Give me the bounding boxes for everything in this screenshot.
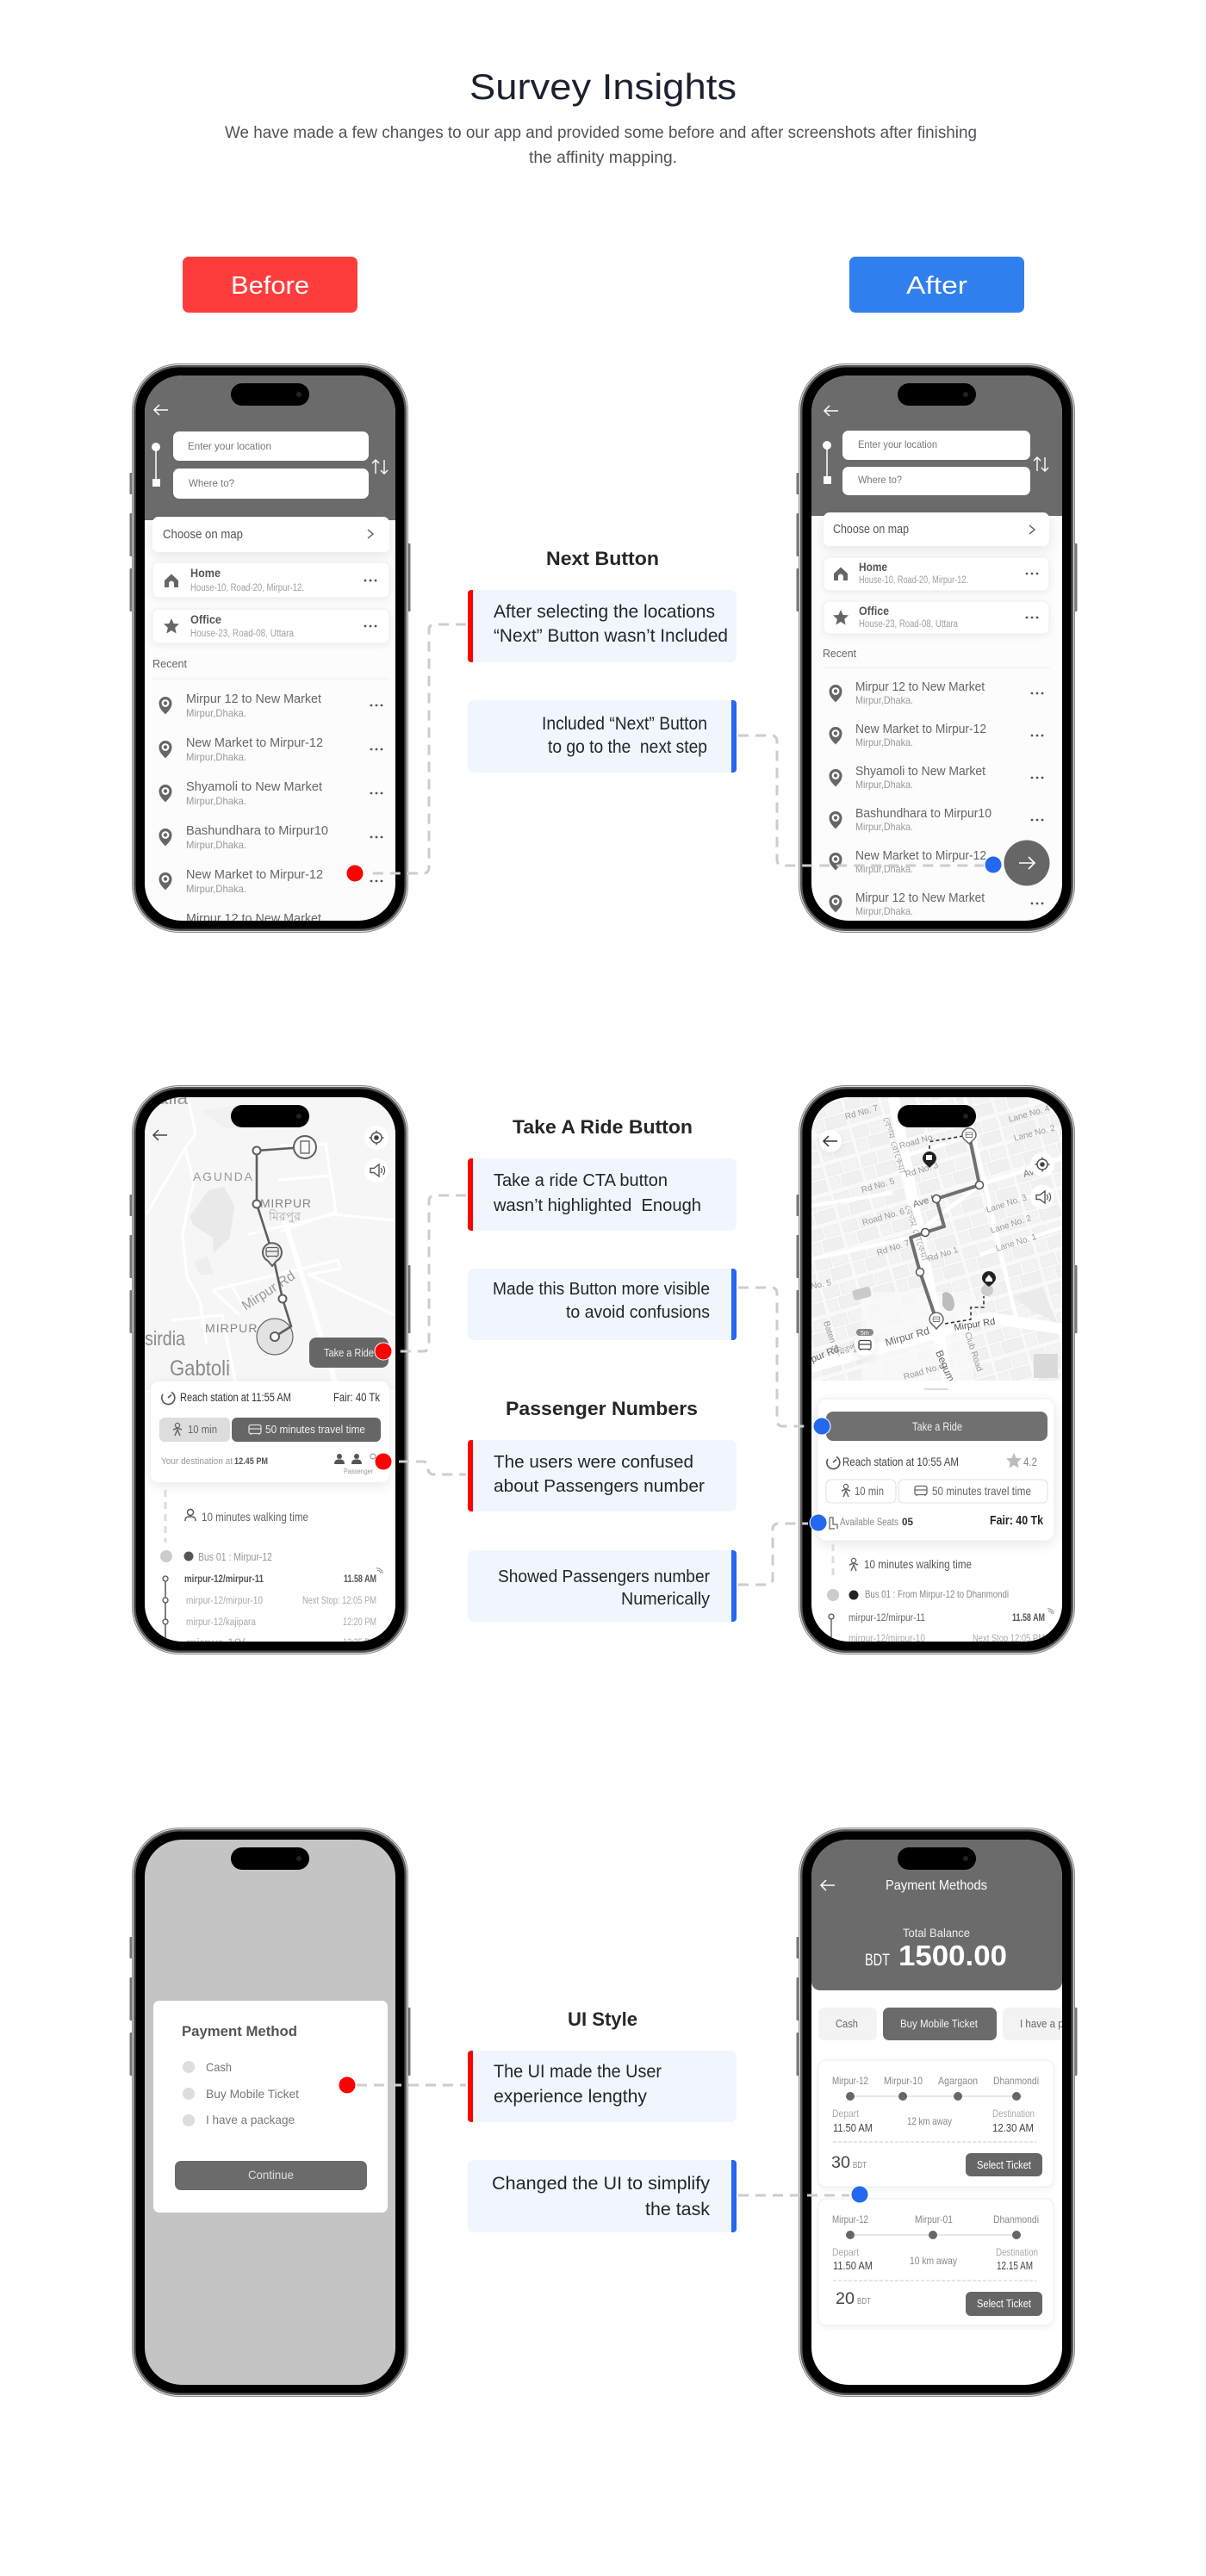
ticket card: 20 BDT: Dhanmondi: [993, 2213, 1039, 2225]
phone: before, location search: New Market to Mirpur-12: [186, 736, 323, 750]
callout: take a ride before: [468, 1158, 737, 1231]
map: before route: মিরপুর: [268, 1209, 301, 1224]
route timeline: 10 minutes walking time: [202, 1510, 308, 1524]
phone: after, location search with next button: Home: [859, 561, 887, 574]
map: after route: Mirpur Rd: [884, 1325, 930, 1349]
map: after route: Baten St: [821, 1320, 841, 1355]
payment method dialog: Continue: [248, 2168, 294, 2182]
map: after route: Rd No. 3: [904, 1161, 940, 1180]
phone: before, location search: House-10, Road-20, Mirpur-12.: [190, 583, 304, 593]
phone: after, detailed route map: [796, 1085, 1077, 1654]
trip summary card: [151, 1381, 389, 1482]
phone: before, location search: Mirpur 12 to New Market: [186, 692, 322, 706]
phone: after, location search with next button: House-23, Road-08, Uttara: [859, 619, 958, 630]
marker: ui style before: [339, 2077, 355, 2093]
route timeline: Next Stop: 12:05 PM: [302, 1596, 376, 1606]
phone: before, location search: Mirpur,Dhaka.: [186, 883, 246, 895]
callout: take a ride after: to avoid confusions: [566, 1303, 710, 1322]
phone: after, location search with next button: Mirpur,Dhaka.: [855, 821, 913, 833]
ticket card: 20 BDT: Destination: [996, 2246, 1038, 2258]
marker: next button before: [346, 865, 364, 882]
phone: after, location search with next button: Enter your location: [858, 438, 937, 450]
phone: after, location search with next button: Recent: [823, 647, 856, 660]
phone: after, location search with next button: Shyamoli to New Market: [855, 764, 986, 779]
callout: take a ride before: Take a ride CTA button: [494, 1171, 668, 1190]
ticket card: 20 BDT: Depart: [832, 2246, 860, 2258]
trip summary card: 12.45 PM: [234, 1456, 268, 1467]
map: before route: AGUNDA: [193, 1170, 253, 1183]
ticket card: 30 BDT: Destination: [992, 2107, 1035, 2120]
map: after route: Club Road: [962, 1331, 984, 1373]
callout: next button before: [468, 590, 737, 662]
phone: after, location search with next button: Choose on map: [833, 523, 909, 537]
callout: passengers before: [468, 1440, 737, 1511]
ticket card: 20 BDT: [818, 2199, 1054, 2325]
phone: after, location search with next button: New Market to Mirpur-12: [855, 848, 986, 863]
phone: after, payment methods: BDT: [865, 1952, 890, 1970]
take a ride button, small: [309, 1338, 389, 1368]
phone: before, location search: Shyamoli to New Market: [186, 779, 323, 794]
phone: after, location search with next button: Mirpur 12 to New Market: [855, 891, 985, 905]
ticket card: 30 BDT: BDT: [853, 2161, 867, 2170]
map: after route: Road No. 6: [861, 1207, 906, 1228]
ticket card: 20 BDT: 20: [836, 2290, 855, 2308]
callout: passengers before: about Passengers number: [494, 1477, 705, 1496]
connector: passengers before: [399, 1462, 466, 1474]
map: before route: Mirpur Rd: [239, 1269, 298, 1313]
take a ride button, full width: Take a Ride: [912, 1420, 962, 1433]
trip summary card: Passenger: [344, 1468, 373, 1475]
ticket card: 20 BDT: Select Ticket: [977, 2297, 1031, 2310]
phone: after, payment methods: [796, 1828, 1077, 2397]
route timeline: Next Stop 12:05 PM: [973, 1634, 1045, 1644]
after badge: [849, 257, 1024, 313]
phone: after, payment methods: Total Balance: [903, 1926, 970, 1940]
callout: ui style after: the task: [645, 2200, 711, 2219]
route timeline: 11.58 AM: [1012, 1613, 1045, 1623]
phone: before, route map: [129, 1085, 410, 1654]
map: after route: Rd No 1: [927, 1245, 960, 1264]
map: after route: Lane No. 2: [990, 1214, 1033, 1236]
section heading: next button: Next Button: [546, 548, 659, 569]
marker: take a ride before: [375, 1343, 392, 1360]
ticket card: 20 BDT: Mirpur-12: [832, 2213, 868, 2225]
intro text: [225, 124, 977, 167]
trip card: 10 min: [855, 1484, 884, 1498]
trip summary card: Reach station at 11:55 AM: [180, 1391, 291, 1404]
marker: next button after: [985, 856, 1001, 873]
map: after route: Ave: [1023, 1165, 1041, 1180]
phone: after, location search with next button: Mirpur,Dhaka.: [855, 736, 913, 748]
trip card: 50 minutes travel time: [932, 1484, 1031, 1498]
phone: after, location search with next button: House-10, Road-20, Mirpur-12.: [859, 575, 968, 586]
take a ride button, full width: [826, 1412, 1047, 1441]
route timeline: mirpur-12/mirpur-10: [849, 1634, 925, 1644]
callout: next button after: Included “Next” Button: [542, 714, 707, 734]
phone: before, location search: New Market to Mirpur-12: [186, 867, 323, 882]
route timeline: Bus 01 : Mirpur-12: [198, 1550, 272, 1563]
phone: after, location search with next button: Mirpur,Dhaka.: [855, 779, 913, 791]
ticket card: 30 BDT: Agargaon: [938, 2075, 978, 2087]
take a ride button, small: Take a Ride: [324, 1346, 374, 1359]
route timeline: mirpur-12/kajipara: [186, 1617, 257, 1628]
map: before route: MIRPUR: [260, 1196, 311, 1210]
callout: ui style after: Changed the UI to simplify: [492, 2174, 711, 2194]
section heading: ui style: UI Style: [568, 2008, 637, 2030]
callout: next button after: [468, 700, 737, 773]
section heading: take a ride button: Take A Ride Button: [513, 1116, 693, 1138]
ticket card: 30 BDT: Depart: [832, 2107, 860, 2120]
phone: before, location search: Mirpur,Dhaka.: [186, 795, 246, 807]
after badge: After: [906, 272, 967, 300]
callout: ui style before: experience lengthy: [494, 2087, 647, 2107]
ticket card: 30 BDT: 30: [831, 2154, 850, 2172]
ticket card: 30 BDT: 11.50 AM: [833, 2121, 873, 2134]
trip summary card: 10 min: [188, 1423, 217, 1436]
connector: ui style after: [738, 2194, 849, 2196]
trip card: Reach station at 10:55 AM: [842, 1455, 959, 1468]
map: after route: [810, 1097, 1062, 1394]
route timeline: mirpur-10/...: [186, 1638, 256, 1648]
phone: after, location search with next button: [796, 363, 1077, 933]
icon: next arrow button: [1004, 841, 1049, 885]
callout: next button before: After selecting the locations: [494, 602, 715, 622]
connector: next button before: [366, 624, 466, 873]
ticket card: 30 BDT: Dhanmondi: [993, 2075, 1039, 2087]
before badge: Before: [231, 272, 309, 300]
connector: ui style before: [357, 2084, 466, 2086]
before badge: [183, 257, 357, 313]
map: after route: Road No. 1: [903, 1361, 948, 1382]
phone: before, location search: Mirpur,Dhaka.: [186, 707, 246, 719]
phone: before, location search: [129, 363, 410, 933]
payment method dialog: Buy Mobile Ticket: [206, 2087, 299, 2101]
route timeline: mirpur-12/mirpur-11: [184, 1574, 264, 1585]
phone: before, payment dialog: [129, 1828, 410, 2397]
phone: before, location search: Home: [190, 567, 221, 580]
map: after route: Lane No. 4: [1008, 1104, 1051, 1125]
intro text: the affinity mapping.: [529, 149, 677, 167]
callout: ui style after: [468, 2160, 737, 2232]
map: after route: Road No.: [898, 1133, 936, 1151]
ticket card: 30 BDT: Mirpur-12: [832, 2075, 868, 2087]
phone: after, location search with next button: Mirpur,Dhaka.: [855, 863, 913, 875]
phone: after, payment methods: I have a package: [1020, 2017, 1096, 2030]
intro text: We have made a few changes to our app and provided some before and after screenshots after finishing: [225, 124, 977, 142]
map: after route: মিরপুর: [835, 1339, 863, 1359]
marker: passengers after: [810, 1514, 827, 1531]
map: before route: [145, 1087, 395, 1390]
trip summary card: 50 minutes travel time: [265, 1423, 365, 1436]
trip card: Available Seats: [840, 1518, 898, 1528]
map: before route: Gabtoli: [170, 1356, 230, 1381]
connector: take a ride after: [738, 1288, 808, 1426]
marker: ui style after: [851, 2186, 868, 2203]
ticket card: 20 BDT: Mirpur-01: [915, 2213, 953, 2225]
title: Survey Insights: [469, 66, 737, 107]
callout: next button before: “Next” Button wasn’t Included: [494, 626, 728, 646]
phone: after, location search with next button: New Market to Mirpur-12: [855, 722, 986, 736]
route timeline: mirpur-12/mirpur-11: [849, 1613, 925, 1623]
payment method dialog: [153, 2001, 388, 2213]
callout: take a ride before: wasn’t highlighted Enough: [493, 1196, 701, 1215]
phone: after, location search with next button: Office: [859, 605, 889, 618]
trip card: [817, 1399, 1054, 1541]
callout: ui style before: [468, 2051, 737, 2122]
callout: passengers after: Showed Passengers number: [498, 1567, 710, 1586]
map: after route: Lane No. 2: [1013, 1123, 1056, 1144]
phone: after, payment methods: Cash: [836, 2017, 858, 2030]
trip card: 05: [902, 1518, 914, 1528]
route timeline: 10 minutes walking time: [864, 1557, 972, 1571]
ticket card: 20 BDT: BDT: [857, 2297, 871, 2306]
route timeline: Bus 01 : From Mirpur-12 to Dhanmondi: [865, 1588, 1009, 1600]
connector: take a ride before: [395, 1195, 466, 1351]
phone: after, location search with next button: Where to?: [858, 474, 902, 486]
phone: after, payment methods: 1500.00: [898, 1940, 1007, 1971]
ticket card: 20 BDT: 11.50 AM: [833, 2259, 873, 2272]
phone: before, location search: Mirpur 12 to New Market: [186, 911, 322, 926]
phone: before, location search: Choose on map: [163, 527, 243, 542]
map: after route: Ave N: [911, 1193, 939, 1210]
phone: before, location search: Where to?: [189, 477, 234, 489]
ticket card: 30 BDT: [818, 2060, 1054, 2187]
map: after route: Rd No. 7: [876, 1238, 911, 1258]
map: after route: Rd No. 5: [861, 1176, 896, 1195]
callout: take a ride after: Made this Button more visible: [493, 1280, 710, 1299]
map: before route: MIRPUR-1: [205, 1321, 270, 1335]
route timeline: mirpur-12/mirpur-10: [186, 1596, 263, 1606]
map: after route: pur Rd: [810, 1344, 841, 1365]
phone: after, location search with next button: Bashundhara to Mirpur10: [855, 806, 992, 821]
callout: next button after: to go to the next step: [548, 737, 707, 757]
phone: before, location search: Office: [190, 613, 221, 626]
map: after route: Begum R: [933, 1349, 961, 1394]
route timeline: 12:20 PM: [343, 1617, 376, 1628]
callout: ui style before: The UI made the User: [494, 2062, 662, 2082]
map: after route: Lane No. 1: [995, 1232, 1038, 1254]
trip summary card: Fair: 40 Tk: [333, 1391, 380, 1404]
ticket card: 20 BDT: 10 km away: [910, 2255, 957, 2267]
payment method dialog: I have a package: [206, 2113, 295, 2126]
callout: passengers before: The users were confused: [494, 1453, 693, 1472]
phone: before, location search: Mirpur,Dhaka.: [186, 751, 246, 763]
callout: passengers after: [468, 1550, 737, 1622]
map: before route: alla: [158, 1087, 189, 1108]
payment method dialog: Payment Method: [182, 2023, 297, 2039]
callout: passengers after: Numerically: [621, 1590, 710, 1609]
route timeline: 11.58 AM: [344, 1574, 376, 1585]
ticket card: 30 BDT: 12.30 AM: [992, 2121, 1034, 2134]
map: after route: বেগম রোকেয়া: [902, 1204, 929, 1263]
connector: next button after: [738, 736, 984, 866]
map: after route: Lane No. 3: [985, 1193, 1029, 1215]
ticket card: 30 BDT: Mirpur-10: [884, 2075, 923, 2087]
map: after route: No. 5: [810, 1278, 832, 1292]
phone: before, location search: Bashundhara to Mirpur10: [186, 823, 328, 838]
map: after route: Mirpur Rd: [954, 1317, 996, 1333]
phone: before, location search: Recent: [152, 657, 187, 670]
connector: passengers after: [738, 1524, 808, 1585]
callout: take a ride after: [468, 1269, 737, 1340]
section heading: passenger numbers: Passenger Numbers: [506, 1398, 698, 1419]
phone: after, location search with next button: Mirpur,Dhaka.: [855, 694, 913, 706]
map: after route: 5m: [861, 1331, 869, 1337]
phone: before, location search: House-23, Road-08, Uttara: [190, 629, 295, 639]
phone: before, location search: Enter your location: [188, 440, 271, 452]
trip summary card: Your destination at: [161, 1456, 233, 1467]
route timeline: 12:35 PM: [343, 1638, 376, 1648]
ticket card: 20 BDT: 12.15 AM: [997, 2259, 1033, 2272]
route timeline: [827, 1544, 1054, 1644]
trip card: 4.2: [1023, 1455, 1037, 1468]
marker: passengers before: [376, 1454, 391, 1469]
map: before route: sirdia: [145, 1327, 185, 1350]
payment method dialog: Cash: [206, 2060, 232, 2074]
map: after route: বেগম রোকেয়া: [880, 1116, 907, 1176]
phone: after, payment methods: Payment Methods: [886, 1878, 987, 1893]
phone: before, location search: Mirpur,Dhaka.: [186, 839, 246, 851]
route timeline: [160, 1490, 382, 1648]
ticket card: 30 BDT: Select Ticket: [977, 2158, 1031, 2171]
ticket card: 30 BDT: 12 km away: [907, 2115, 952, 2127]
phone: after, payment methods: Buy Mobile Ticket: [900, 2017, 978, 2030]
trip card: Fair: 40 Tk: [990, 1514, 1044, 1528]
phone: after, location search with next button: Mirpur,Dhaka.: [855, 905, 913, 917]
marker: take a ride after: [813, 1418, 830, 1435]
map: after route: Rd No. 7: [844, 1103, 880, 1122]
phone: after, location search with next button: Mirpur 12 to New Market: [855, 680, 985, 694]
